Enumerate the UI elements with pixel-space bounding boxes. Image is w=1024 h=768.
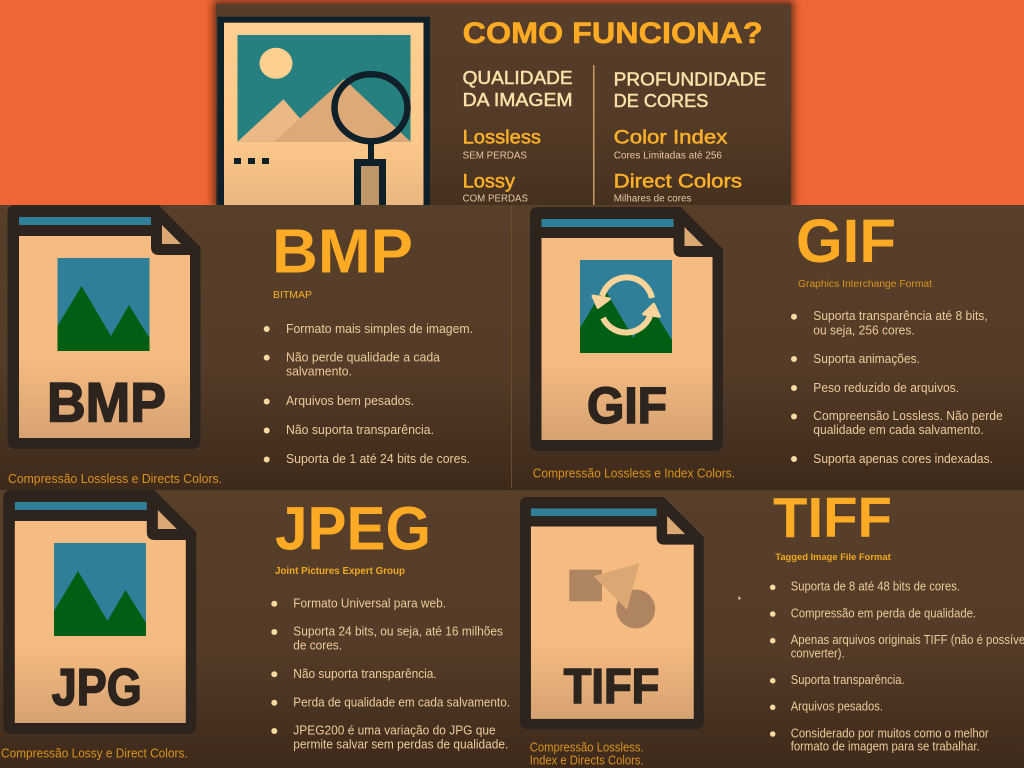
list: TIFF features: Suporta de 8 até 48 bits de cores.: [791, 580, 960, 594]
list: TIFF features: formato de imagem para se trabalhar.: [791, 740, 980, 754]
list: JPEG features: Formato Universal para web.: [293, 596, 446, 610]
text: lossless: [463, 127, 541, 161]
heading: qualidade da imagem: QUALIDADE: [463, 68, 573, 88]
list: JPEG features: permite salvar sem perdas de qualidade.: [293, 738, 508, 752]
heading: como funciona: COMO FUNCIONA?: [463, 17, 763, 50]
subtitle: joint pictures expert group: Joint Pictures Expert Group: [275, 566, 405, 577]
list: JPEG features: [271, 596, 510, 752]
heading: BMP: BMP: [272, 218, 413, 287]
heading: profundidade de cores: [614, 69, 766, 111]
icon: recycle arrows: [593, 277, 659, 333]
list: JPEG features: Suporta 24 bits, ou seja, até 16 milhões: [293, 625, 503, 639]
list: TIFF features: [770, 580, 1024, 754]
list: JPEG features: Não suporta transparência.: [293, 667, 437, 681]
subtitle: bitmap: BITMAP: [273, 289, 312, 301]
caption: TIFF compression: Compressão Lossless.: [530, 740, 644, 754]
list: GIF features: [791, 309, 1003, 466]
list: JPEG features: Perda de qualidade em cada salvamento.: [293, 695, 510, 709]
caption: TIFF compression: [530, 740, 644, 768]
icon: GIF file: GIF: [587, 377, 667, 434]
caption: JPEG compression: Compressão Lossy e Direct Colors.: [1, 746, 188, 760]
list: GIF features: Suporta apenas cores indexadas.: [813, 452, 993, 466]
heading: profundidade de cores: PROFUNDIDADE: [614, 69, 766, 89]
heading: JPEG: JPEG: [275, 495, 431, 563]
list: JPEG features: JPEG200 é uma variação do JPG que: [293, 724, 496, 738]
list: BMP features: Não suporta transparência.: [286, 423, 434, 437]
heading: GIF: GIF: [796, 207, 896, 275]
list: TIFF features: Compressão em perda de qualidade.: [791, 606, 976, 620]
text: lossless: SEM PERDAS: [463, 150, 527, 161]
icon: TIFF file: [520, 497, 704, 729]
list: TIFF features: Suporta transparência.: [791, 673, 905, 687]
panel: BMP: [0, 205, 512, 490]
text: direct colors: Milhares de cores: [614, 194, 691, 205]
text: lossy: Lossy: [463, 171, 516, 192]
list: JPEG features: de cores.: [293, 639, 342, 653]
list: BMP features: Suporta de 1 até 24 bits de cores.: [286, 452, 470, 466]
subtitle: tagged image file format: Tagged Image File Format: [775, 552, 892, 563]
text: lossless: Lossless: [463, 127, 541, 148]
text: color index: [614, 127, 728, 161]
list: TIFF features: Considerado por muitos como o melhor: [791, 726, 989, 740]
heading: TIFF: TIFF: [773, 486, 892, 550]
icon: mouse cursor: [738, 596, 741, 600]
text: lossy: COM PERDAS: [463, 194, 528, 205]
panel: JPEG: [0, 488, 512, 768]
heading: qualidade da imagem: [463, 68, 573, 110]
list: GIF features: Suporta transparência até 8 bits,: [813, 309, 988, 323]
list: BMP features: Não perde qualidade a cada: [286, 350, 440, 364]
icon: BMP file: BMP: [47, 371, 166, 434]
list: BMP features: salvamento.: [286, 365, 352, 379]
text: direct colors: [614, 171, 742, 205]
list: GIF features: qualidade em cada salvamento.: [813, 423, 984, 437]
icon: JPG file: [3, 490, 196, 734]
text: color index: Color Index: [614, 127, 728, 148]
caption: TIFF compression: Index e Directs Colors.: [530, 754, 644, 768]
list: GIF features: ou seja, 256 cores.: [813, 324, 915, 338]
list: BMP features: Arquivos bem pesados.: [286, 394, 414, 408]
list: TIFF features: Arquivos pesados.: [791, 700, 883, 714]
panel: TIFF: [512, 486, 1024, 768]
panel: como funciona: [213, 0, 794, 208]
icon: JPG file: JPG: [52, 659, 142, 717]
list: BMP features: Formato mais simples de imagem.: [286, 322, 473, 336]
caption: BMP compression: Compressão Lossless e Directs Colors.: [8, 472, 222, 486]
icon: TIFF file: TIFF: [564, 660, 659, 714]
text: direct colors: Direct Colors: [614, 171, 742, 192]
icon: GIF file: [530, 207, 723, 451]
text: color index: Cores Limitadas até 256: [614, 150, 722, 161]
list: GIF features: Compreensão Lossless. Não perde: [813, 409, 1003, 423]
caption: GIF compression: Compressão Lossless e Index Colors.: [533, 467, 735, 481]
list: GIF features: Suporta animações.: [813, 352, 920, 366]
subtitle: graphics interchange format: Graphics Interchange Format: [798, 279, 932, 290]
icon: image with magnifier: [218, 17, 430, 209]
list: BMP features: [264, 322, 473, 466]
text: lossy: [463, 171, 528, 205]
heading: profundidade de cores: DE CORES: [614, 91, 708, 111]
heading: qualidade da imagem: DA IMAGEM: [463, 90, 573, 110]
panel: GIF: [511, 205, 1024, 490]
list: GIF features: Peso reduzido de arquivos.: [813, 381, 959, 395]
icon: BMP file: [8, 205, 200, 449]
list: TIFF features: converter).: [791, 646, 845, 660]
